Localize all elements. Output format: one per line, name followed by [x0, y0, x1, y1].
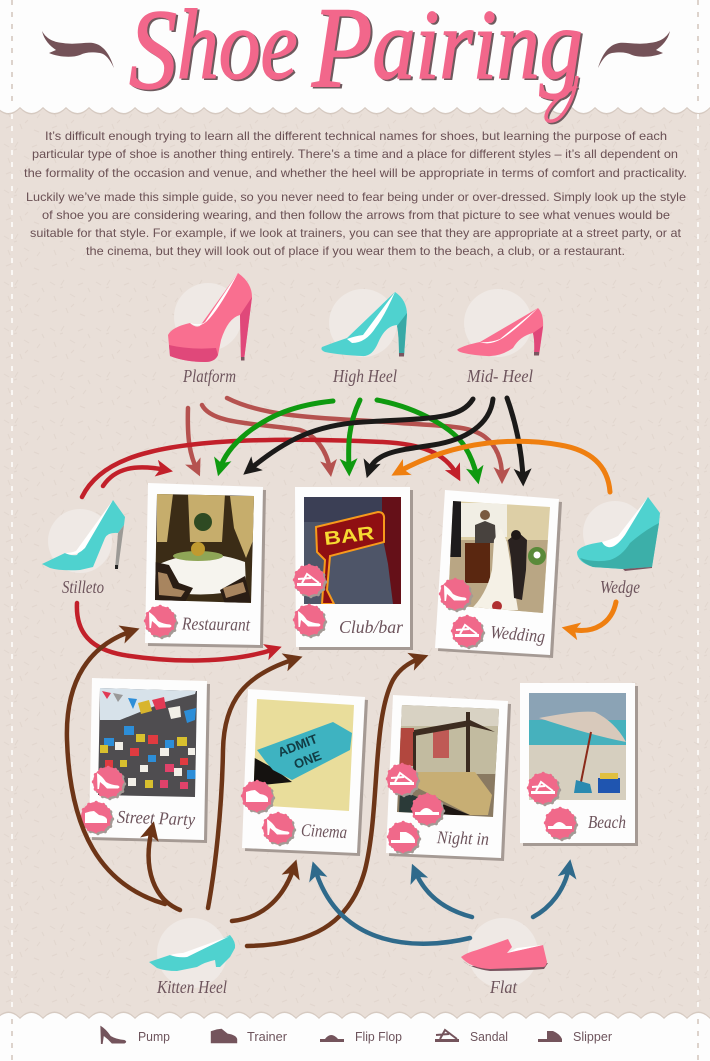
label: restaurant: Restaurant [181, 613, 251, 635]
intro text: It’s difficult enough trying to learn all the different technical names for shoes, but learning the purpose of each [45, 130, 667, 143]
arrow: stiletto to club [77, 603, 275, 660]
photo: wedding [449, 501, 550, 613]
shoe: wedge [577, 497, 660, 571]
ornament: left flourish [42, 31, 114, 68]
title [129, 0, 585, 123]
shoe: high heel [321, 289, 407, 357]
intro text: particular type of shoe is another thing entirely. There’s a time and a place for different styles – it’s all dependent on [32, 148, 678, 161]
photo: bar: BAR [323, 523, 376, 550]
label: street party: Street Party [117, 807, 195, 829]
legend label: flip flop: Flip Flop [355, 1030, 402, 1044]
photo: restaurant [155, 494, 254, 603]
legend label: trainer: Trainer [247, 1030, 287, 1044]
legend icon: trainer [211, 1029, 237, 1043]
arrows: mid heel [249, 398, 523, 479]
intro text: of shoe you are considering wearing, and then follow the arrows from that picture to see what venues would be [42, 209, 670, 222]
polaroid: wedding [435, 490, 562, 658]
legend icon: sandal [435, 1030, 459, 1042]
legend label: slipper: Slipper [573, 1030, 612, 1044]
ornament: right flourish [598, 31, 670, 68]
arrows: flat [315, 867, 569, 944]
badge: flip flop [412, 794, 444, 826]
badge: trainer [81, 802, 113, 834]
photo: street party [98, 688, 197, 797]
arrow: wedge to club [398, 441, 610, 492]
photo: bar [304, 497, 401, 604]
photo: cinema: ADMIT [276, 731, 320, 760]
arrows: high heel [220, 400, 477, 477]
badge: pump [440, 579, 472, 611]
arrow: stiletto to restaurant [103, 467, 166, 486]
badge: sandal [387, 764, 419, 796]
badge: trainer [242, 781, 274, 813]
header band [0, 0, 710, 114]
intro text: the formality of the occasion and venue, and whether the heel will be appropriate in terms of comfort and practicality. [24, 167, 687, 180]
polaroid: night in [386, 695, 511, 861]
arrows: platform [188, 398, 502, 477]
shoe: platform [168, 273, 252, 362]
label: wedding: Wedding [489, 622, 546, 646]
polaroid: beach [520, 683, 638, 846]
polaroid: street party [81, 678, 210, 843]
legend label: sandal: Sandal [470, 1030, 508, 1044]
photo: cinema: ONE [292, 748, 324, 772]
legend icon: pump [100, 1026, 126, 1044]
label: night in: Night in [436, 827, 489, 849]
legend label: pump: Pump [138, 1030, 170, 1044]
shoe: kitten heel [149, 918, 235, 988]
photo: bedroom [397, 705, 499, 817]
label: high heel: High Heel [332, 366, 397, 386]
badge: slipper [388, 822, 420, 854]
label: kitten heel: Kitten Heel [156, 977, 227, 997]
label: flat: Flat [489, 977, 518, 997]
label: platform: Platform [182, 366, 236, 386]
label: mid heel: Mid- Heel [466, 366, 533, 386]
label: wedge: Wedge [600, 577, 640, 597]
shoe: flat [461, 918, 548, 988]
polaroid: cinema [242, 689, 368, 856]
legend icon: flip flop [320, 1035, 344, 1042]
legend icon: slipper [538, 1031, 562, 1042]
shoe: mid heel [457, 289, 543, 357]
arrow: wedge to wedding [569, 602, 616, 630]
badge: flip flop [545, 808, 577, 840]
intro text: suitable for that style. For example, if we look at trainers, you can see that they are appropriate at a street party, or at [30, 227, 682, 240]
badge: sandal [452, 616, 484, 648]
label: club/bar: Club/bar [339, 617, 404, 637]
polaroid: club/bar [294, 487, 413, 650]
footer band [0, 1012, 710, 1061]
label: stiletto: Stilleto [62, 577, 104, 597]
label: cinema: Cinema [301, 820, 348, 842]
badge: sandal [294, 565, 326, 597]
label: beach: Beach [588, 812, 626, 832]
arrow: stiletto to wedding [82, 440, 457, 497]
intro text [24, 130, 687, 258]
badge: pump [294, 605, 326, 637]
badge: sandal [528, 773, 560, 805]
intro text: Luckily we’ve made this simple guide, so you never need to fear being under or over-dressed. Simply look up the style [26, 191, 686, 204]
intro text: the cinema, but they will look out of place if you wear them to the beach, a club, or a restaurant. [86, 245, 625, 258]
arrows: kitten heel [67, 631, 421, 946]
polaroid: restaurant [145, 483, 266, 648]
badge: pump [263, 813, 295, 845]
shoe: stiletto [42, 500, 125, 573]
badge: pump [93, 767, 125, 799]
photo: beach [529, 693, 626, 800]
legend [100, 1026, 612, 1044]
photo: cinema [254, 699, 354, 811]
badge: pump [145, 606, 177, 638]
